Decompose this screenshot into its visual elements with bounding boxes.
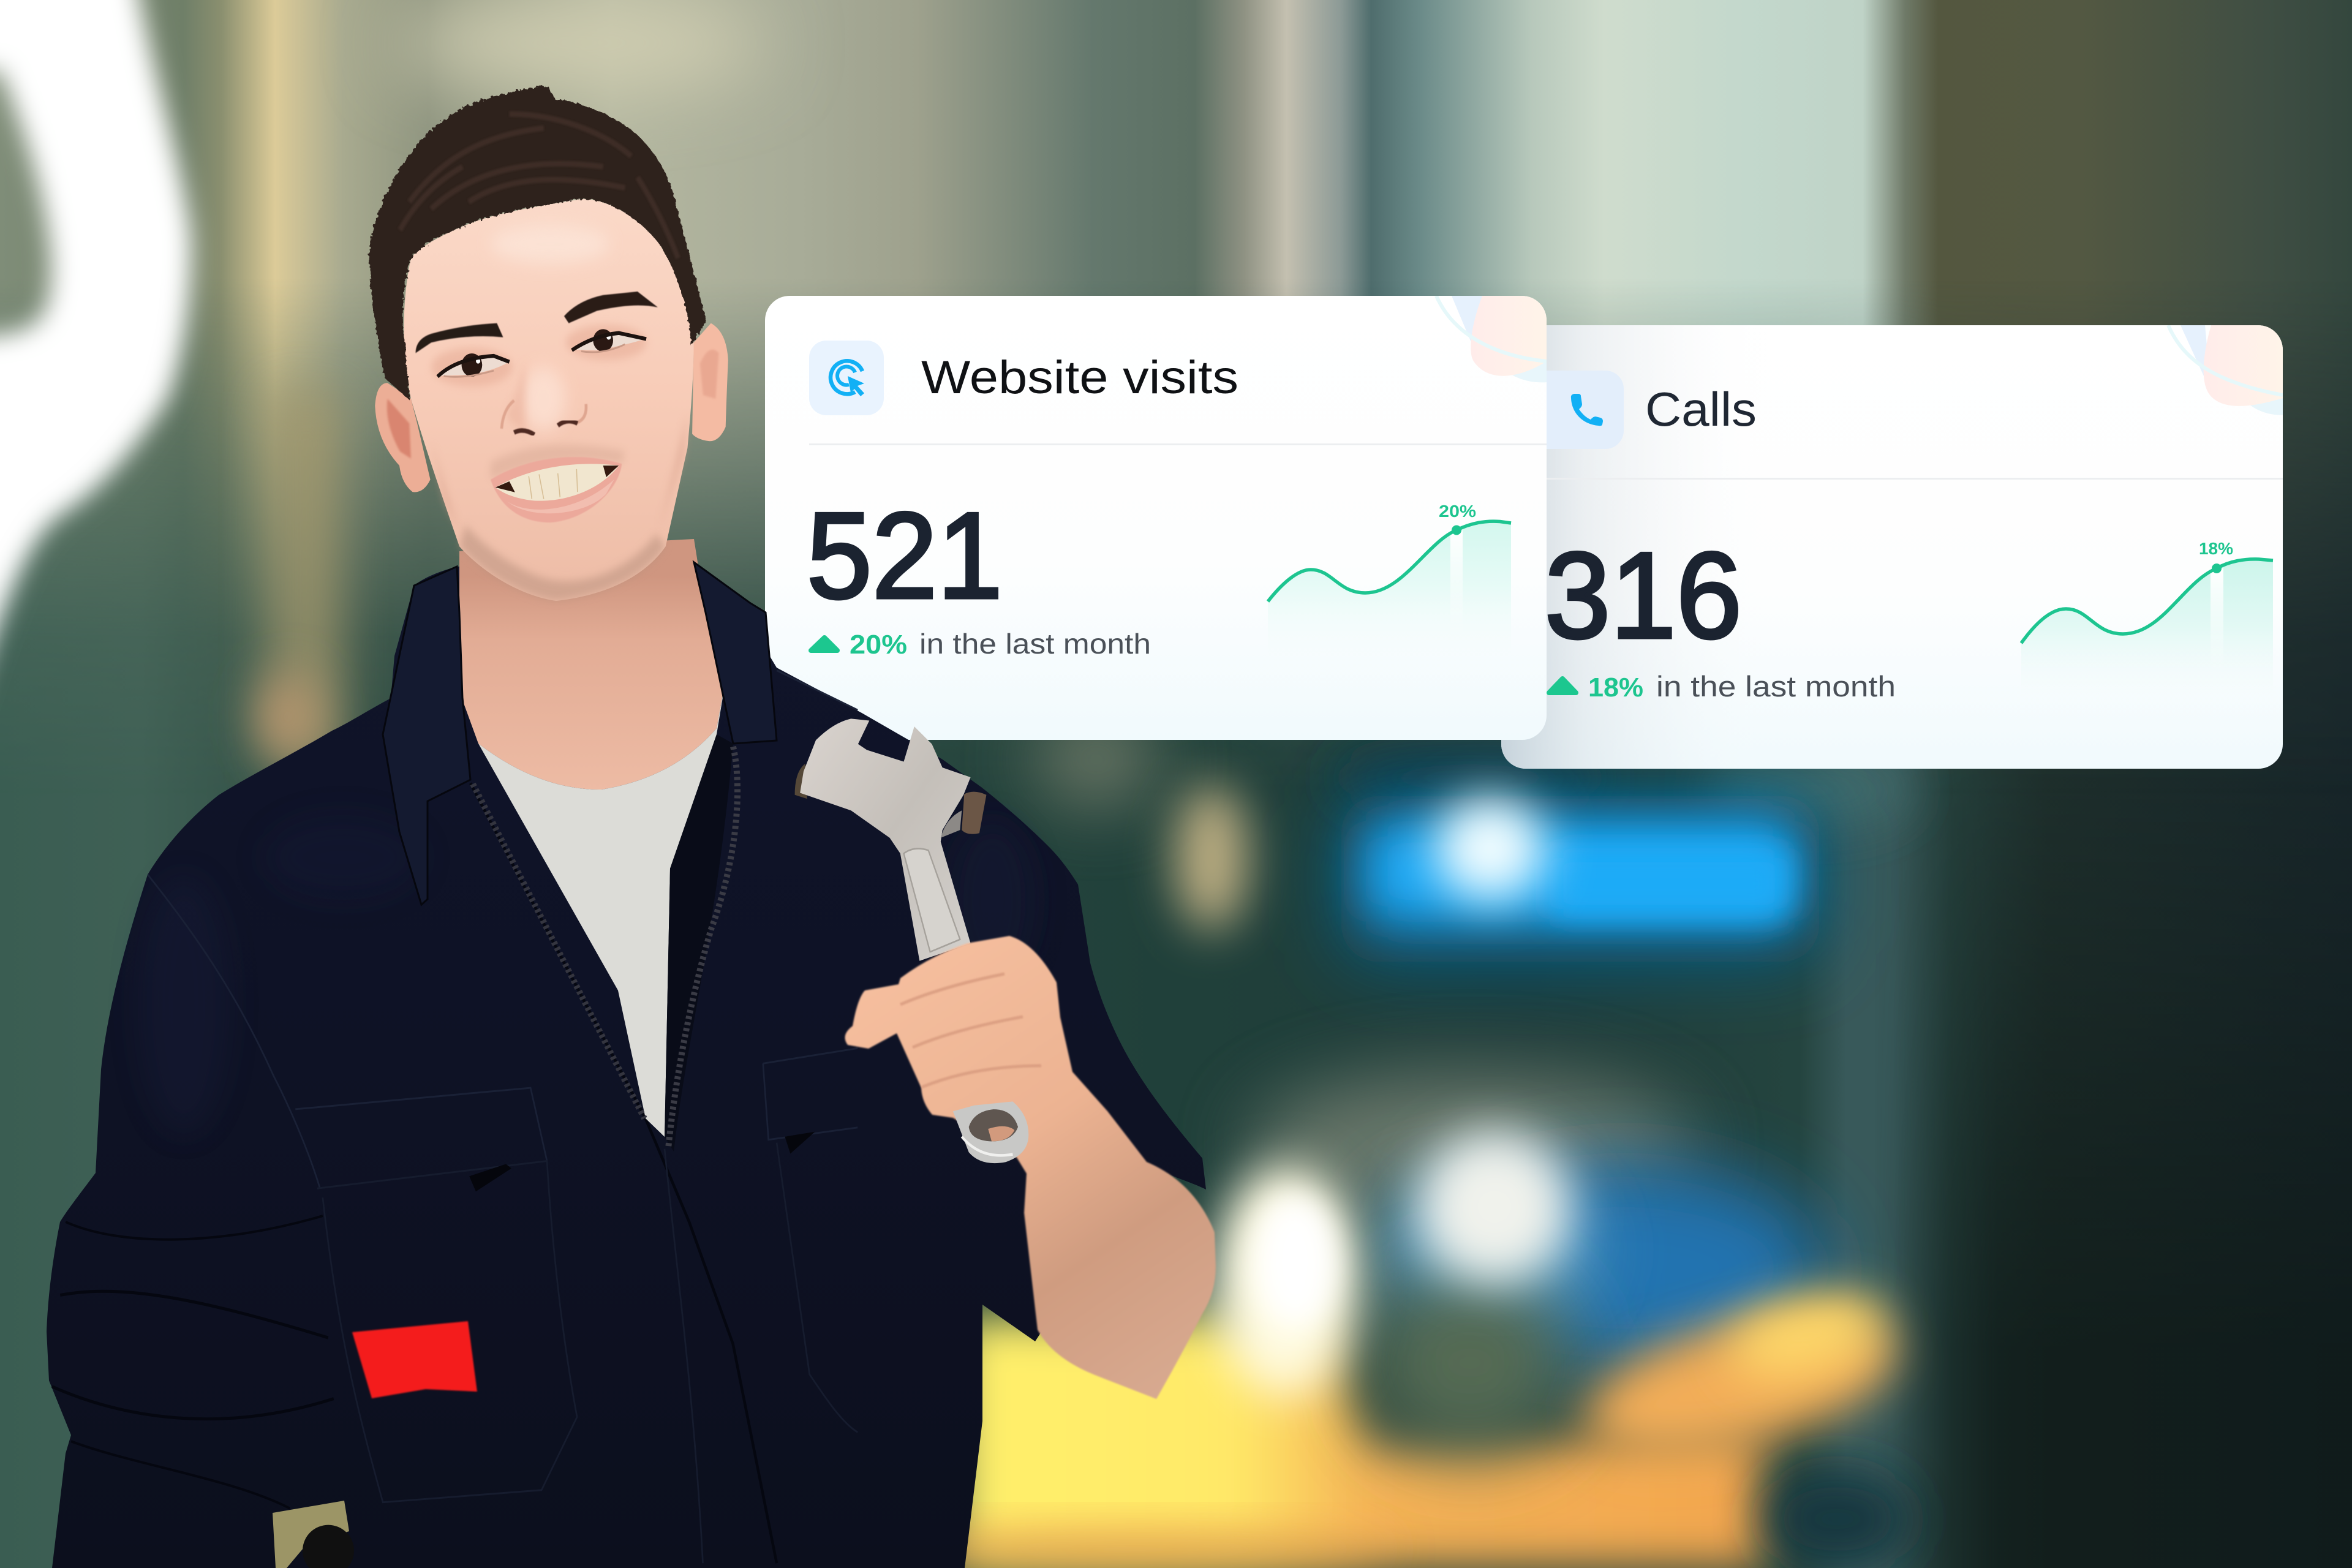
mouth bbox=[491, 457, 622, 522]
adjust throat bbox=[941, 810, 962, 838]
nose highlight bbox=[522, 367, 565, 431]
heading: website visits: Website visits bbox=[921, 352, 1238, 404]
change: 18% in the last month bbox=[1549, 670, 1896, 703]
website icon tile bbox=[809, 341, 884, 415]
panel: calls card bbox=[1501, 325, 2303, 769]
head bbox=[369, 86, 728, 601]
change: 18% in the last month: 18% bbox=[1588, 673, 1643, 703]
sleeve folds and pocket seams bbox=[52, 671, 858, 1563]
nose bbox=[502, 401, 586, 429]
icon: phone bbox=[1571, 394, 1603, 426]
sparkline: calls: 18% bbox=[2199, 539, 2233, 558]
decorative corner blobs bbox=[2167, 325, 2283, 415]
t-shirt bbox=[478, 668, 728, 1137]
change: 20% in the last month: in the last month bbox=[919, 628, 1151, 660]
jacket collar bbox=[383, 562, 777, 1152]
stubble shadow bbox=[459, 526, 666, 601]
decorative corner blobs bbox=[1436, 296, 1556, 382]
nose side shadow bbox=[507, 360, 525, 434]
sparkline: website visits: 20% bbox=[1439, 502, 1476, 521]
change: 20% in the last month: 20% bbox=[850, 630, 907, 660]
hand and forearm bbox=[845, 936, 1216, 1399]
change: 18% in the last month: in the last month bbox=[1656, 670, 1896, 703]
sparkline: website visits bbox=[1268, 502, 1511, 658]
face bbox=[404, 199, 694, 601]
heading: calls: Calls bbox=[1645, 382, 1757, 436]
wrench ring end over hand bbox=[953, 1101, 1028, 1163]
forehead highlight bbox=[491, 225, 609, 263]
zippers bbox=[473, 784, 644, 1118]
icon: click target bbox=[831, 361, 864, 396]
wrench body bbox=[800, 718, 971, 961]
hair highlights bbox=[400, 114, 678, 258]
handle groove bbox=[904, 848, 960, 952]
right ear bbox=[692, 323, 728, 441]
calls icon tile bbox=[1525, 371, 1624, 449]
fabric highlights bbox=[138, 876, 230, 1133]
value: 316: 316 bbox=[1545, 527, 1742, 664]
hair bbox=[369, 86, 706, 401]
left ear bbox=[375, 383, 431, 492]
wrench bbox=[795, 718, 986, 961]
sparkline: calls bbox=[2021, 539, 2273, 701]
white glow ring at upper left bbox=[0, 0, 191, 729]
person: mechanic with wrench bbox=[47, 86, 1216, 1568]
panel: website visits card bbox=[765, 296, 1556, 740]
jacket bbox=[47, 562, 1206, 1568]
finger creases bbox=[900, 974, 1041, 1087]
eye socket shading bbox=[431, 348, 513, 386]
right knob bbox=[962, 792, 986, 834]
value: 521: 521 bbox=[807, 488, 1003, 624]
pocket zipper pulls bbox=[469, 1132, 815, 1191]
eyebrows bbox=[416, 323, 503, 353]
left knob bbox=[795, 764, 807, 799]
neck bbox=[459, 539, 728, 790]
eyes bbox=[437, 356, 510, 376]
upper-lip stubble bbox=[491, 445, 625, 480]
gap between arm and torso bbox=[273, 1501, 349, 1568]
change: 20% in the last month bbox=[811, 628, 1151, 660]
red tape patch bbox=[352, 1321, 477, 1398]
